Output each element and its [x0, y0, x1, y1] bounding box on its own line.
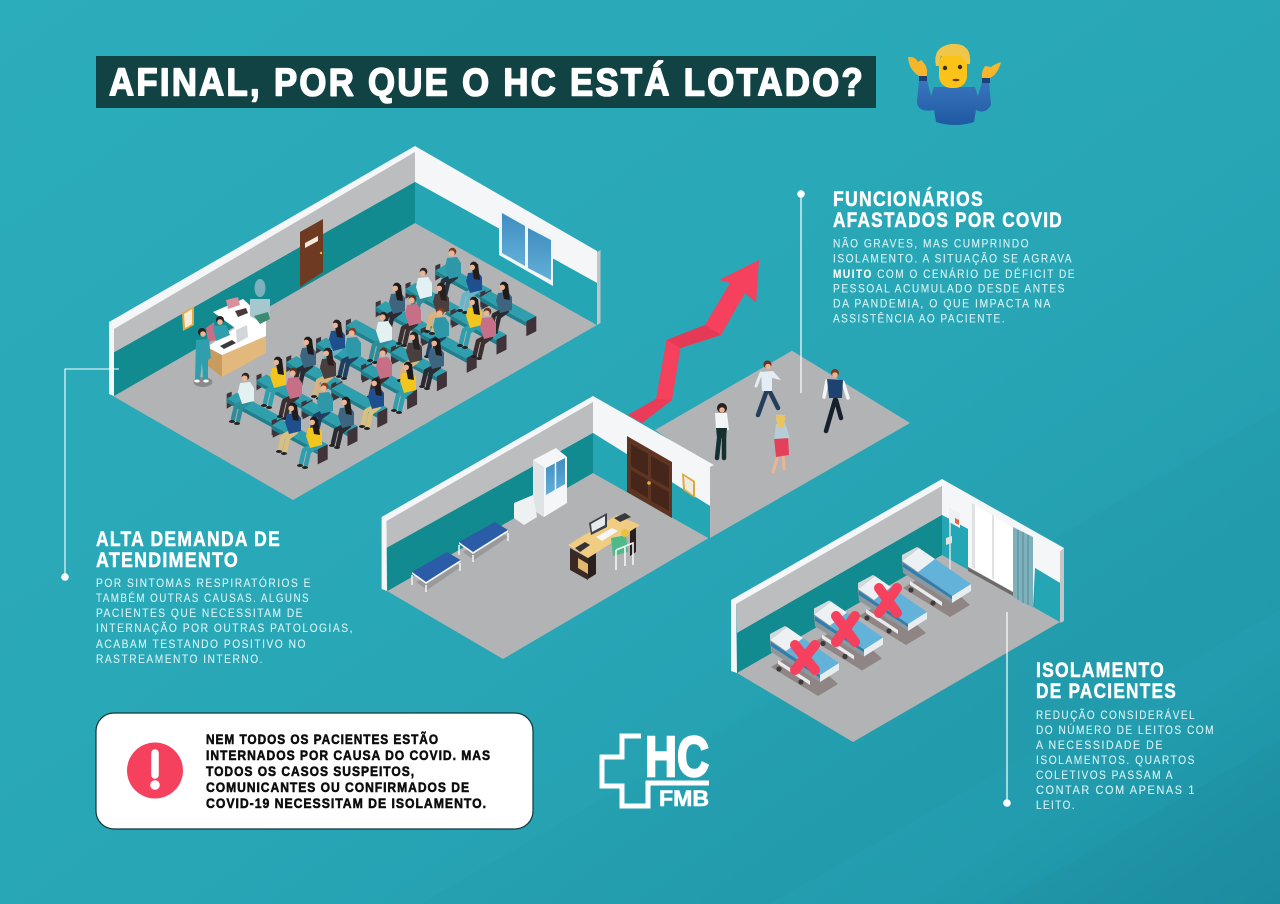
- woman in white blouse: [715, 403, 729, 458]
- cabinet: [533, 448, 567, 517]
- callout text: INTERNADOS POR CAUSA DO COVID. MAS: [206, 747, 491, 763]
- right wall: [593, 396, 714, 539]
- leader line: isolamento: [1003, 612, 1011, 807]
- reception desk: [207, 297, 266, 377]
- text block: isolamento de pacientes: ISOLAMENTOS. QUARTOS: [1036, 755, 1196, 767]
- text block: funcionários afastados: ISOLAMENTO. A SITUAÇÃO SE AGRAVA: [833, 252, 1073, 266]
- stretcher top: [459, 522, 508, 562]
- text block: isolamento de pacientes: CONTAR COM APENAS 1: [1036, 785, 1196, 797]
- text block: isolamento de pacientes: [1036, 659, 1215, 812]
- waiting benches: [227, 264, 536, 464]
- text block: alta demanda: ACABAM TESTANDO POSITIVO NO: [96, 639, 307, 651]
- text block: isolamento de pacientes: REDUÇÃO CONSIDERÁVEL: [1036, 709, 1196, 722]
- logo: HC FMB: [602, 725, 709, 811]
- seated patients: [229, 248, 512, 469]
- leader line: funcionários: [797, 190, 805, 393]
- text block: funcionários afastados: FUNCIONÁRIOS: [833, 188, 984, 211]
- poster: [182, 306, 194, 331]
- logo: HC FMB: HC: [645, 725, 709, 789]
- walking staff: [715, 360, 848, 472]
- callout text: [206, 730, 491, 811]
- text block: funcionários afastados: PESSOAL ACUMULADO DESDE ANTES: [833, 284, 1066, 296]
- man with vest: [824, 369, 848, 431]
- text block: alta demanda: TAMBÉM OUTRAS CAUSAS. ALGUNS: [96, 592, 310, 605]
- callout text: NEM TODOS OS PACIENTES ESTÃO: [206, 730, 439, 747]
- text block: funcionários afastados: AFASTADOS POR COVID: [833, 209, 1063, 232]
- text block: funcionários afastados: [833, 188, 1076, 326]
- title: AFINAL, POR QUE O HC ESTÁ LOTADO?: [109, 60, 865, 104]
- icon: shrugging man emoji: [908, 44, 1001, 125]
- room: hospital beds: [731, 479, 1064, 742]
- callout text: COVID-19 NECESSITAM DE ISOLAMENTO.: [206, 795, 487, 811]
- callout text: TODOS OS CASOS SUSPEITOS,: [206, 763, 415, 779]
- left wall: [731, 479, 942, 673]
- text block: alta demanda: ALTA DEMANDA DE: [96, 528, 281, 551]
- logo: HC FMB: FMB: [659, 786, 709, 811]
- arrow: rising red arrow: [628, 260, 759, 423]
- room: waiting room: [109, 146, 600, 500]
- poster: [682, 473, 695, 498]
- right wall: [942, 479, 1064, 623]
- text block: alta demanda: RASTREAMENTO INTERNO.: [96, 654, 264, 666]
- receptionist: [206, 316, 230, 342]
- icon: exclamation: [127, 742, 183, 798]
- desk with doctor: [568, 513, 640, 580]
- room: exam office: [382, 396, 714, 659]
- right wall: [415, 146, 600, 325]
- window door: [968, 503, 1013, 596]
- hallway floor: [655, 351, 910, 538]
- text block: alta demanda: [96, 528, 354, 666]
- red crosses: [795, 588, 897, 670]
- stretcher bottom: [412, 552, 461, 592]
- double door: [627, 436, 672, 518]
- leader line: alta demanda: [61, 369, 119, 581]
- left wall: [382, 396, 593, 591]
- curtain: [1013, 527, 1033, 608]
- text block: isolamento de pacientes: A NECESSIDADE DE: [1036, 740, 1164, 752]
- text block: alta demanda: ATENDIMENTO: [96, 549, 239, 572]
- text block: alta demanda: PACIENTES QUE NECESSITAM DE: [96, 608, 304, 620]
- text block: funcionários afastados: MUITO COM O CENÁRIO DE DÉFICIT DE: [833, 268, 1076, 281]
- title bar: [96, 56, 876, 108]
- text block: funcionários afastados: ASSISTÊNCIA AO PACIENTE.: [833, 312, 1006, 326]
- side unit: [514, 495, 537, 525]
- text block: funcionários afastados: DA PANDEMIA, O QUE IMPACTA NA: [833, 298, 1052, 310]
- window: [499, 209, 553, 286]
- water cooler: [250, 279, 270, 324]
- text block: isolamento de pacientes: DO NÚMERO DE LEITOS COM: [1036, 724, 1215, 737]
- IV pole: [944, 508, 960, 576]
- text block: alta demanda: POR SINTOMAS RESPIRATÓRIOS E: [96, 577, 312, 590]
- nurse standing: [194, 328, 212, 387]
- text block: isolamento de pacientes: ISOLAMENTO: [1036, 659, 1165, 682]
- text block: funcionários afastados: NÃO GRAVES, MAS CUMPRINDO: [833, 238, 1030, 250]
- callout: alert box: [96, 713, 533, 829]
- text block: isolamento de pacientes: LEITO.: [1036, 800, 1076, 812]
- left wall: [109, 146, 415, 396]
- man in light shirt: [756, 360, 781, 415]
- door: [300, 219, 323, 287]
- text block: isolamento de pacientes: DE PACIENTES: [1036, 680, 1177, 703]
- blonde woman in red skirt: [773, 414, 790, 472]
- text block: isolamento de pacientes: COLETIVOS PASSAM A: [1036, 770, 1174, 782]
- callout text: COMUNICANTES OU CONFIRMADOS DE: [206, 779, 470, 795]
- beds: [770, 547, 971, 696]
- text block: alta demanda: INTERNAÇÃO POR OUTRAS PATOLOGIAS,: [96, 622, 354, 635]
